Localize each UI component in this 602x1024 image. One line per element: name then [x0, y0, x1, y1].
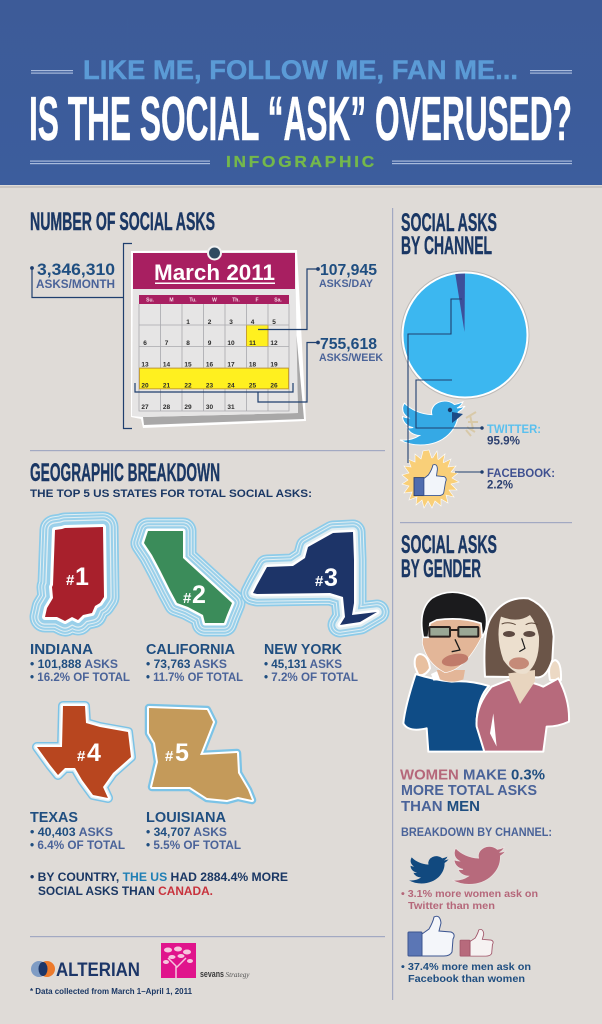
- facebook gender text: • 37.4% more men ask on: [401, 961, 531, 973]
- label: facebook: FACEBOOK:: [487, 468, 555, 480]
- stats: Indiana: • 101,888 ASKS: [30, 659, 118, 671]
- state map: New York: 3: [324, 564, 338, 592]
- twitter gender text: [401, 888, 538, 912]
- subheading: breakdown by channel: BREAKDOWN BY CHANNEL:: [401, 827, 552, 839]
- state map: Louisiana: #: [165, 748, 174, 765]
- label: twitter: 95.9%: [487, 436, 520, 448]
- calendar: 9: [208, 340, 212, 347]
- calendar: 2: [208, 319, 212, 326]
- calendar: 19: [270, 362, 278, 368]
- summary statement: WOMEN MAKE 0.3%: [400, 766, 545, 784]
- subheading: THE TOP 5 US STATES FOR TOTAL SOCIAL ASKS:: [30, 488, 312, 500]
- stat: asks per month: ASKS/MONTH: [36, 277, 115, 291]
- heading: social asks by gender: [401, 531, 497, 583]
- stat: asks per month: [36, 261, 115, 291]
- calendar: 4: [251, 319, 255, 326]
- icon: pink twitter bird: [452, 846, 506, 884]
- stats: California: • 11.7% OF TOTAL: [146, 672, 243, 684]
- calendar: 23: [206, 382, 213, 390]
- calendar: 21: [163, 382, 170, 390]
- stat: asks per day: ASKS/DAY: [319, 278, 374, 290]
- stat: asks per week: 755,618: [320, 336, 377, 353]
- footnote: * Data collected from March 1–April 1, 2011: [30, 987, 193, 996]
- state map: Louisiana: [149, 708, 252, 800]
- panel: number of social asks: [30, 208, 383, 428]
- calendar: 12: [270, 340, 278, 347]
- calendar: 31: [227, 404, 235, 411]
- calendar: March 2011: [154, 260, 275, 285]
- man: [403, 592, 489, 752]
- stats: Texas: • 40,403 ASKS: [30, 827, 113, 839]
- calendar: Tu.: [189, 298, 197, 304]
- state map: Indiana: #: [66, 572, 75, 589]
- stats: Indiana: [30, 642, 130, 684]
- state map: New York: [253, 532, 377, 625]
- stats: Texas: TEXAS: [30, 810, 78, 826]
- stats: Indiana: INDIANA: [30, 642, 94, 658]
- heading: geographic breakdown: GEOGRAPHIC BREAKDOWN: [30, 459, 220, 487]
- calendar: Sa.: [274, 298, 282, 304]
- label: twitter: TWITTER:: [487, 424, 541, 436]
- calendar: 14: [163, 362, 170, 368]
- twitter gender text: • 3.1% more women ask on: [401, 888, 538, 900]
- calendar: 25: [249, 382, 256, 390]
- stats: Texas: • 6.4% OF TOTAL: [30, 840, 125, 852]
- panel: social asks by channel: [400, 209, 555, 508]
- state map: California: 2: [192, 581, 206, 609]
- logo: Alterian: ALTERIAN: [56, 959, 140, 981]
- heading: social asks by gender: BY GENDER: [401, 555, 481, 583]
- logo: Sevans Strategy: Strategy: [226, 970, 250, 979]
- calendar: 7: [165, 340, 169, 347]
- calendar: 16: [206, 362, 213, 368]
- logo: Alterian: [31, 959, 140, 981]
- icon: facebook thumb badge: [402, 450, 459, 508]
- calendar: Su.: [146, 298, 154, 304]
- stats: Louisiana: [146, 810, 241, 852]
- state map: California: #: [183, 590, 192, 607]
- calendar: 29: [184, 404, 192, 411]
- calendar: 26: [270, 382, 278, 390]
- calendar: 5: [272, 319, 276, 326]
- connector lines: [408, 299, 483, 473]
- label: twitter: [487, 424, 541, 448]
- state map: Louisiana: 5: [175, 739, 189, 767]
- calendar: 11: [249, 340, 256, 347]
- twitter gender text: Twitter than men: [408, 900, 495, 912]
- label: facebook: [487, 468, 555, 492]
- footer logos: [30, 943, 250, 996]
- facebook gender text: Facebook than women: [408, 973, 525, 985]
- summary statement: MORE TOTAL ASKS: [401, 782, 537, 799]
- logo: Sevans Strategy: sevans: [200, 969, 224, 979]
- header banner: [0, 0, 602, 188]
- state map: New York: #: [315, 573, 324, 590]
- callout: country comparison: SOCIAL ASKS THAN CANADA.: [38, 886, 213, 898]
- calendar: Th.: [232, 298, 240, 304]
- stats: New York: NEW YORK: [264, 642, 343, 658]
- state map: Indiana: [45, 527, 104, 621]
- callout: country comparison: • BY COUNTRY, THE US HAD 2884.4% MORE: [30, 872, 288, 884]
- panel: geographic breakdown: [30, 459, 377, 898]
- calendar: 27: [141, 404, 149, 411]
- calendar: 20: [141, 382, 149, 390]
- connector lines: [31, 244, 319, 428]
- logo: Sevans Strategy: [161, 943, 250, 979]
- calendar: 22: [184, 382, 192, 390]
- label: facebook: 2.2%: [487, 480, 513, 492]
- stats: Louisiana: • 34,707 ASKS: [146, 827, 227, 839]
- facebook gender text: [401, 961, 531, 985]
- calendar: 18: [249, 362, 256, 368]
- calendar: 13: [141, 362, 149, 368]
- calendar: 6: [143, 340, 147, 347]
- icon: pink thumbs up: [460, 929, 493, 956]
- calendar: 30: [206, 404, 213, 411]
- infographic tag: INFOGRAPHIC: [226, 154, 377, 171]
- state map: California: [144, 531, 232, 623]
- stats: Texas: [30, 810, 125, 852]
- state map: Indiana: 1: [75, 563, 89, 591]
- calendar: 24: [227, 382, 235, 390]
- icon: blue thumbs up: [408, 916, 454, 956]
- stat: asks per day: 107,945: [320, 262, 377, 279]
- heading: social asks by channel: SOCIAL ASKS: [401, 209, 497, 237]
- icon: twitter bird: [400, 401, 478, 445]
- state map: Texas: [37, 706, 131, 798]
- stat: asks per week: [319, 336, 383, 364]
- stats: California: CALIFORNIA: [146, 642, 236, 658]
- kicker heading: LIKE ME, FOLLOW ME, FAN ME...: [83, 55, 518, 85]
- calendar: 10: [227, 340, 235, 347]
- calendar: W: [212, 298, 217, 304]
- stat: asks per day: [319, 262, 377, 290]
- woman: [477, 598, 569, 752]
- panel: social asks by gender: [400, 531, 569, 985]
- calendar: F: [255, 298, 259, 304]
- summary statement: [400, 766, 545, 815]
- stat: asks per month: 3,346,310: [37, 261, 115, 279]
- callout: country comparison: [30, 872, 288, 898]
- calendar: 1: [186, 319, 190, 326]
- stat: asks per week: ASKS/WEEK: [319, 352, 383, 364]
- stats: Indiana: • 16.2% OF TOTAL: [30, 672, 130, 684]
- heading: social asks by channel: BY CHANNEL: [401, 232, 492, 260]
- heading: social asks by gender: SOCIAL ASKS: [401, 531, 497, 559]
- calendar: 8: [186, 340, 190, 347]
- calendar: M: [169, 298, 174, 304]
- state map: Texas: #: [77, 748, 86, 765]
- calendar: 17: [227, 362, 235, 368]
- calendar: [131, 246, 306, 428]
- summary statement: THAN MEN: [401, 798, 480, 815]
- stats: New York: • 7.2% OF TOTAL: [264, 672, 358, 684]
- calendar: 28: [163, 404, 170, 411]
- heading: social asks by channel: [401, 209, 497, 260]
- state map: Texas: 4: [87, 739, 101, 767]
- stats: Louisiana: • 5.5% OF TOTAL: [146, 840, 241, 852]
- stats: Louisiana: LOUISIANA: [146, 810, 227, 826]
- stats: California: [146, 642, 243, 684]
- stats: California: • 73,763 ASKS: [146, 659, 227, 671]
- illustration: man and woman: [403, 592, 569, 752]
- stats: New York: • 45,131 ASKS: [264, 659, 342, 671]
- stats: New York: [264, 642, 358, 684]
- calendar: 3: [229, 319, 233, 326]
- heading: number of social asks: NUMBER OF SOCIAL ASKS: [30, 208, 215, 236]
- icon: blue twitter bird: [409, 856, 449, 883]
- pie chart: [400, 270, 530, 400]
- calendar: 15: [184, 362, 192, 368]
